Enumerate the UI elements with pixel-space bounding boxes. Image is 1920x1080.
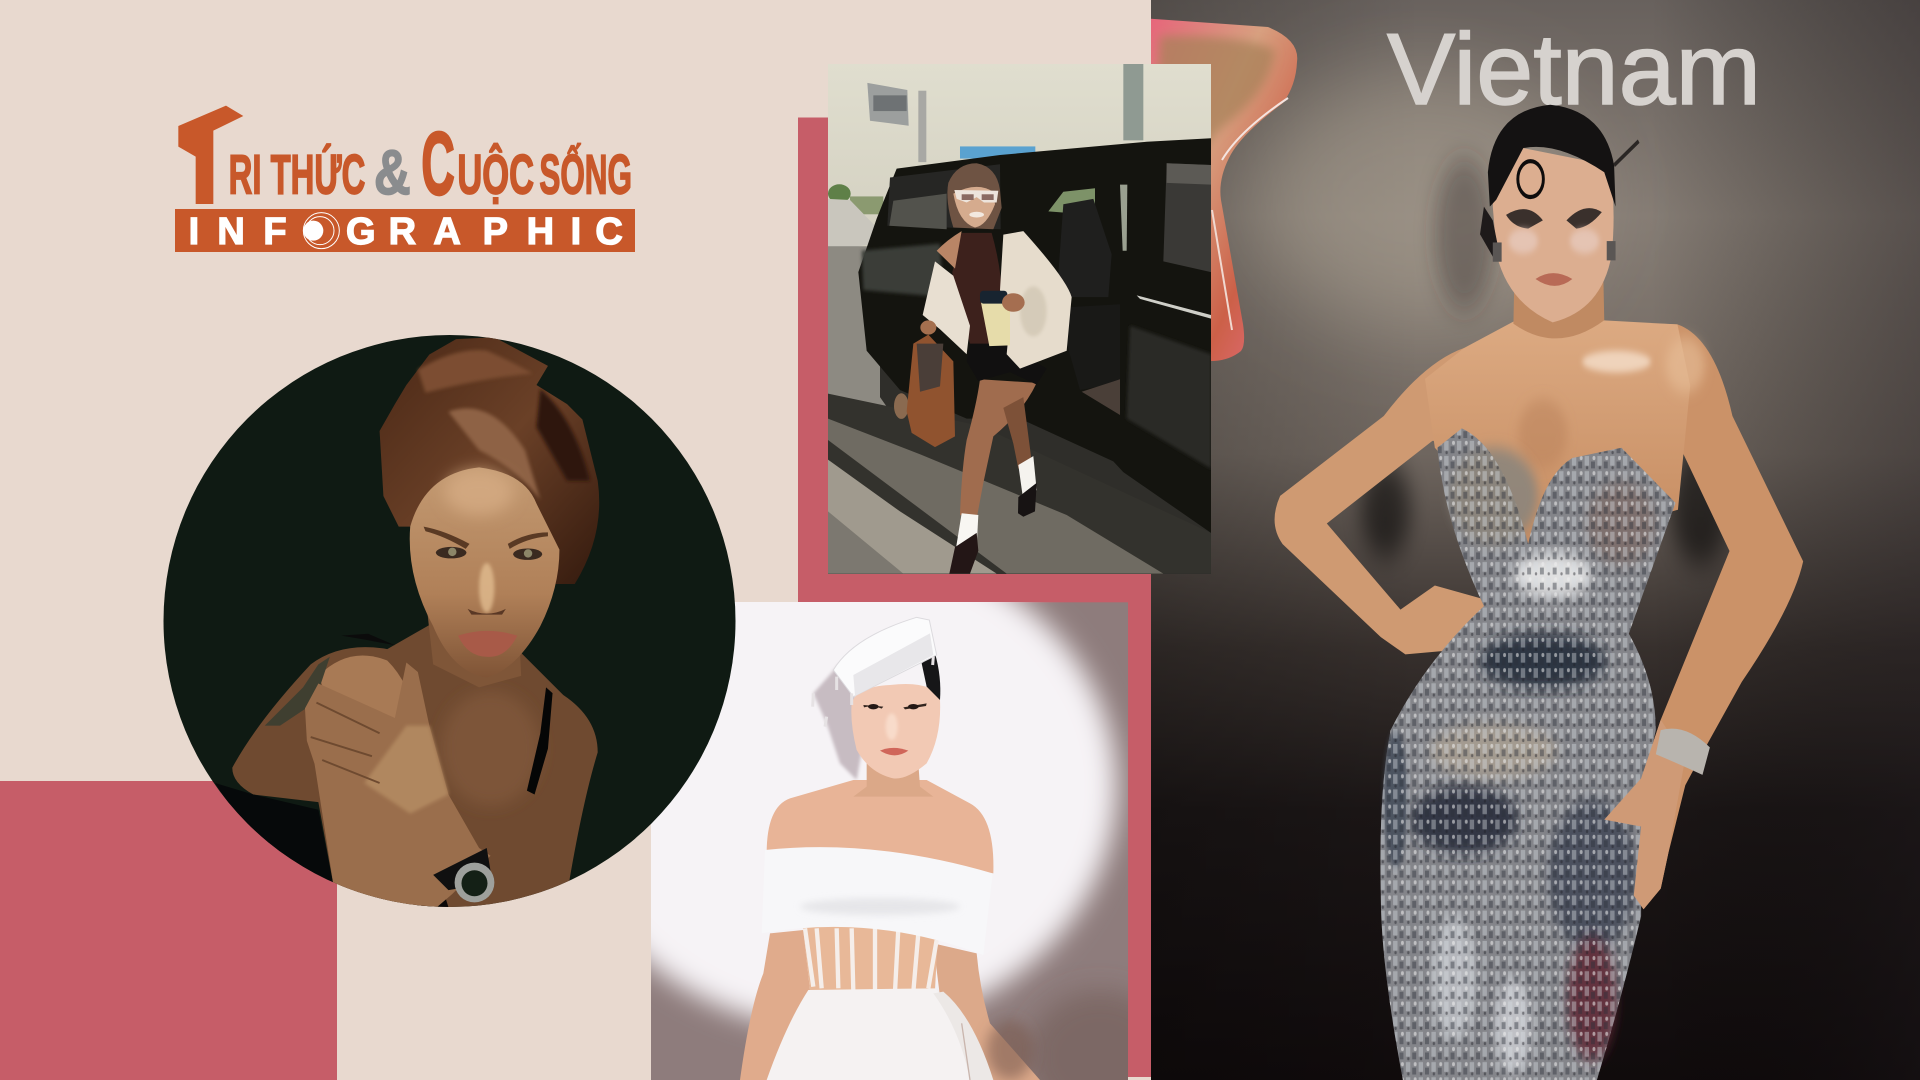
arms and torso skin [1275,320,1803,909]
block: pink frame behind photos [798,118,1151,1077]
handbag and fur charm [894,335,955,447]
hand over shoulder [305,662,491,920]
sky [828,61,1211,261]
logo: Tri thức & Cuộc sống Infographic [175,106,635,253]
backdrop word Vietnam: Vietnam [1387,14,1761,126]
icon: rings inside letter O [301,210,342,251]
spotlight wall [563,543,1173,1080]
blue billboard [960,146,1035,159]
wordmark: SỐNG: SỐNG [539,143,632,205]
black shorts [980,379,1037,384]
wordmark: ampersand: & [374,138,411,208]
control tower [1123,61,1143,140]
coffee cup [980,291,1025,346]
panel: lower photo, woman in white hat and gown [563,543,1173,1080]
brown top [952,233,1002,344]
resting hand on hip [1604,720,1685,909]
panel: circular portrait [150,320,750,920]
legs [960,379,1037,519]
shoulders [767,780,993,873]
face [410,467,559,678]
wrist watch [433,848,494,902]
block: pink square bottom left [0,781,337,1080]
wordmark: RI THỨC: RI THỨC [229,143,365,205]
banner: orange bar [175,209,635,252]
wall backdrop [1151,0,1920,1080]
black van [858,138,1211,533]
head and hair [937,163,1002,269]
white hat [813,617,937,727]
sequin dress [1380,428,1675,1080]
bracelet [1656,729,1710,775]
head and face [1480,105,1639,338]
panel: right photo, woman in sequin dress [1140,0,1920,1080]
neck [426,596,521,687]
road sign [867,83,926,162]
icon: logo letter T [178,106,243,204]
white off-shoulder band [766,847,992,940]
socks and shoes [949,456,1037,574]
black tank top [215,634,553,907]
dark green backdrop [150,320,750,920]
trees and white car [828,184,883,248]
pavement and curb [828,394,1163,574]
sheer corset with boning [803,925,938,992]
banner text: INFOGRAPHIC: INFOGRAPHIC [189,211,623,253]
wordmark: large C: C [421,113,455,213]
hair [380,337,599,584]
wet ground [828,246,886,406]
arms [740,930,1040,1080]
raised hand on bag [920,320,936,335]
white skirt [767,988,993,1080]
logo star on wall [1140,18,1297,361]
wet ground base [828,246,1211,575]
wordmark: UỘC: UỘC [457,143,534,205]
arm and shoulder behind [232,618,598,920]
neck and face [851,653,940,797]
cream jacket [923,231,1072,369]
panel: top photo, woman stepping out of van [828,61,1211,575]
wall shadow behind figure [1361,158,1729,565]
hat shadow [812,668,862,780]
woman figure [1275,105,1803,1080]
